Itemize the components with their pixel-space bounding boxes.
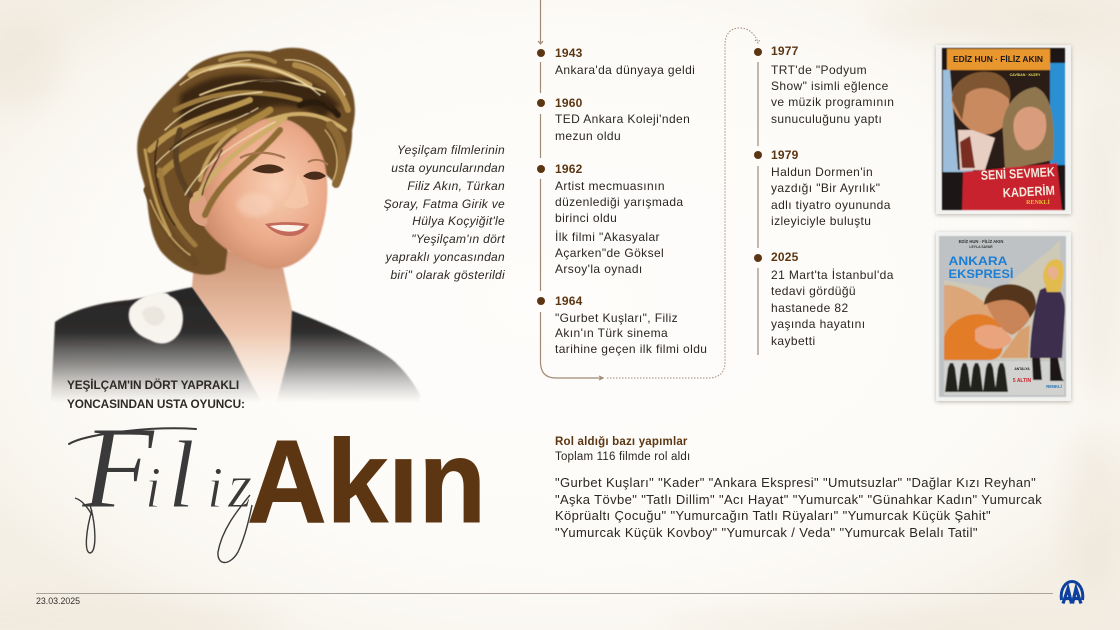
timeline right column: izleyiciyle buluştu [771,214,871,228]
timeline left column: Açarken"de Göksel [555,246,664,260]
entry 1964: 1964 [555,294,582,308]
poster: Ankara Ekspresi: LEYLA SAYAR [969,245,993,249]
dot 1977 [754,48,762,56]
timeline right column: 21 Mart'ta İstanbul'da [771,268,894,282]
entry 1977: 1977 [771,44,798,58]
intro paragraph [384,143,506,282]
dot 1943 [537,49,545,57]
intro paragraph: biri" olarak gösterildi [390,268,505,282]
poster: Ankara Ekspresi: EKSPRESİ [948,266,1014,281]
timeline left column [537,46,707,356]
poster: Seni Sevmek Kaderim: CAVİDAN · KUZEY [1010,73,1041,77]
face [198,118,327,269]
intro paragraph: Filiz Akın, Türkan [407,179,505,193]
timeline connector lines [538,0,760,380]
timeline right column [754,44,894,348]
coat [51,286,420,399]
poster: Seni Sevmek Kaderim: KADERİM [1002,183,1055,200]
timeline left column: Artist mecmuasının [555,179,665,193]
hair back [137,48,355,275]
name title: i [145,455,161,520]
hair front strands [145,55,348,262]
intro paragraph: Şoray, Fatma Girik ve [384,197,505,211]
timeline right column: tedavi gördüğü [771,284,856,298]
filmography heading: Toplam 116 filmde rol aldı [555,451,690,463]
filmography list [555,475,1042,540]
portrait photo of Filiz Akın [51,46,420,399]
filmography list: "Yumurcak Küçük Kovboy" "Yumurcak / Veda" "Yumurcak Belalı Tatil" [555,525,978,540]
poster: Seni Sevmek Kaderim: RENKLİ [1026,199,1051,206]
dot 2025 [754,254,762,262]
intro paragraph: usta oyuncularından [391,161,505,175]
poster: Ankara Ekspresi: 5 ALTIN [1013,378,1032,384]
name title: z [227,453,252,521]
icon: AA logo [1060,580,1084,604]
poster: Ankara Ekspresi: EDİZ HUN · FİLİZ AKIN [959,239,1003,244]
timeline left column: Ankara'da dünyaya geldi [555,63,695,77]
dot 1979 [754,151,762,159]
timeline right column: yaşında hayatını [771,317,865,331]
facial features [237,153,328,236]
name title: i [207,455,223,520]
filmography heading: Rol aldığı bazı yapımlar [555,436,688,448]
timeline right column: Show" isimli eğlence [771,79,889,93]
intro paragraph: Hülya Koçyiğit'le [412,214,505,228]
timeline right column: sunuculuğunu yaptı [771,112,882,126]
timeline right column: Haldun Dormen'in [771,165,873,179]
timeline right column: kaybetti [771,334,816,348]
timeline left column: "Gurbet Kuşları", Filiz [555,311,678,325]
poster: Ankara Ekspresi: ANTALYA [1014,367,1030,371]
timeline left column: mezun oldu [555,129,621,143]
timeline left column: Arsoy'la oynadı [555,262,643,276]
entry 2025: 2025 [771,250,798,264]
entry 1960: 1960 [555,96,582,110]
timeline right column: yazdığı "Bir Ayrılık" [771,181,880,195]
intro paragraph: "Yeşilçam'ın dört [411,232,505,246]
timeline left column: TED Ankara Koleji'nden [555,112,690,126]
poster: Seni Sevmek Kaderim: EDİZ HUN · FİLİZ AKIN [953,54,1043,64]
timeline left column: İlk filmi "Akasyalar [555,230,660,244]
poster: Ankara Ekspresi: RENKLİ [1046,384,1062,389]
filmography list: "Gurbet Kuşları" "Kader" "Ankara Ekspresi" "Umutsuzlar" "Dağlar Kızı Reyhan" [555,475,1036,490]
filmography list: Köprüaltı Çocuğu" "Yumurcağın Tatlı Rüyaları" "Yumurcak Küçük Şahit" [555,508,991,523]
subtitle heading: YEŞİLÇAM'IN DÖRT YAPRAKLI [67,378,239,392]
timeline left column: birinci oldu [555,211,617,225]
entry 1979: 1979 [771,148,798,162]
filmography heading [555,436,690,463]
timeline right column: hastanede 82 [771,301,849,315]
ear [189,191,208,226]
timeline left column: Akın'ın Türk sinema [555,326,668,340]
subtitle heading [67,378,245,411]
date: 23.03.2025 [36,596,80,606]
poster: Ankara Ekspresi [934,230,1074,404]
name title: l [168,421,195,528]
dot 1960 [537,99,545,107]
timeline right column: ve müzik programının [771,95,894,109]
poster: Ankara Ekspresi: ANKARA [948,254,1008,268]
poster: Seni Sevmek Kaderim [934,44,1074,218]
rose brooch [129,292,183,344]
intro paragraph: Yeşilçam filmlerinin [397,143,505,157]
entry 1962: 1962 [555,162,582,176]
timeline left column: tarihine geçen ilk filmi oldu [555,342,707,356]
timeline left column: düzenlediği yarışmada [555,195,683,209]
footer rule [36,593,1053,594]
filmography list: "Aşka Tövbe" "Tatlı Dillim" "Acı Hayat" "Yumurcak" "Günahkar Kadın" Yumurcak [555,492,1042,507]
dot 1964 [537,297,545,305]
poster: Seni Sevmek Kaderim: SENİ SEVMEK [980,164,1056,183]
subtitle heading: YONCASINDAN USTA OYUNCU: [67,397,245,411]
timeline right column: adlı tiyatro oyununda [771,198,891,212]
timeline right column: TRT'de "Podyum [771,63,867,77]
neck and neckline [191,250,293,398]
entry 1943: 1943 [555,46,582,60]
intro paragraph: yapraklı yoncasından [386,250,505,264]
dot 1962 [537,165,545,173]
name title [68,420,486,564]
